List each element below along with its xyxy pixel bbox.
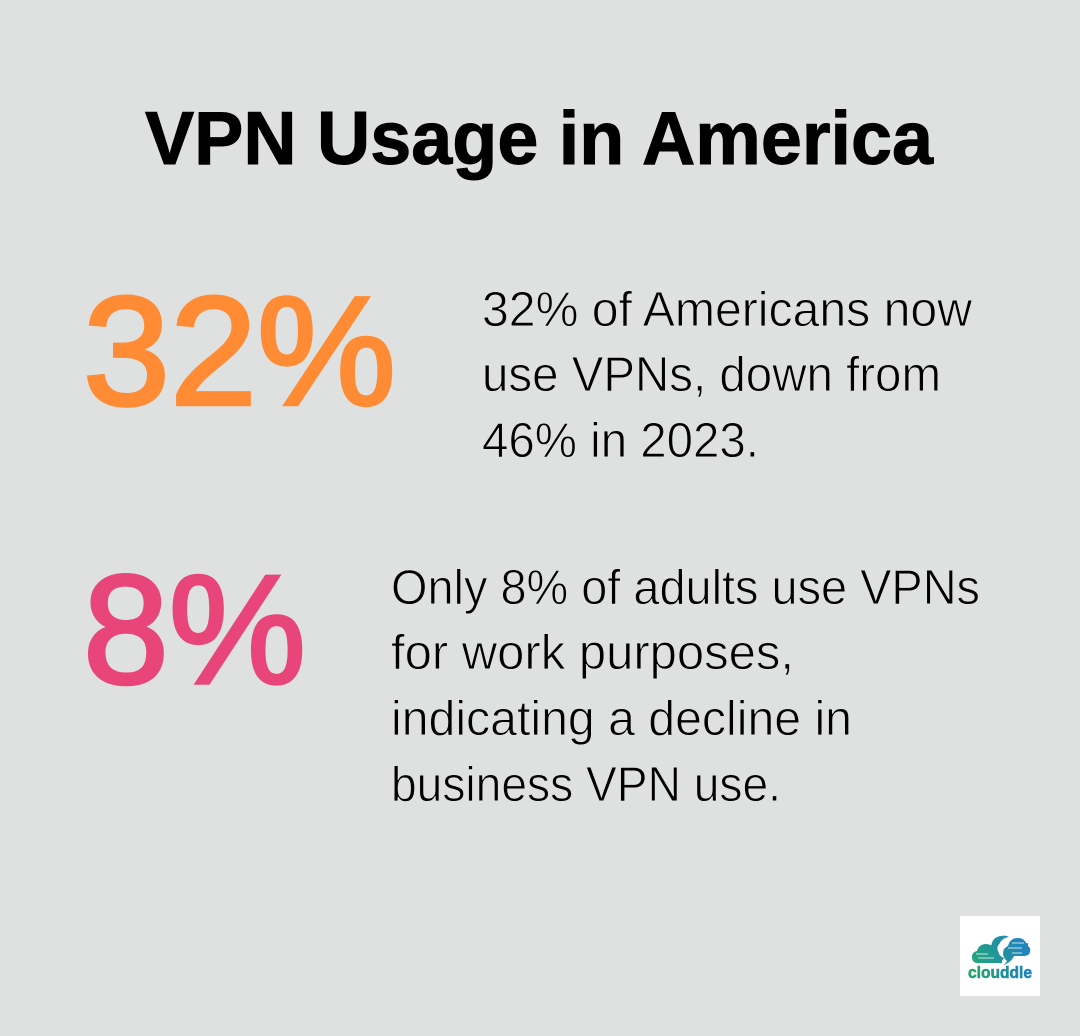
text block: 8% description bbox=[391, 561, 980, 812]
stat: 8%: 8% bbox=[83, 543, 306, 716]
text block: 8% description: indicating a decline in bbox=[391, 692, 852, 746]
logo wordmark: clouddle bbox=[968, 963, 1032, 982]
text block: 32% description: 32% of Americans now bbox=[482, 283, 973, 337]
icon: cloud circuit lines bbox=[976, 943, 1024, 958]
text block: 8% description: for work purposes, bbox=[391, 626, 794, 680]
text block: 8% description: business VPN use. bbox=[391, 758, 781, 812]
text block: 32% description bbox=[482, 283, 973, 468]
title: VPN Usage in America bbox=[145, 96, 934, 180]
text block: 32% description: use VPNs, down from bbox=[482, 348, 941, 402]
icon: right cloud bbox=[1001, 938, 1030, 966]
stat: 32%: 32% bbox=[83, 264, 396, 438]
logo: clouddle bbox=[960, 916, 1040, 996]
icon: back cloud bbox=[991, 936, 1009, 964]
text block: 32% description: 46% in 2023. bbox=[482, 414, 759, 468]
icon: left cloud bbox=[972, 944, 1002, 963]
text block: 8% description: Only 8% of adults use VPNs bbox=[391, 561, 980, 615]
